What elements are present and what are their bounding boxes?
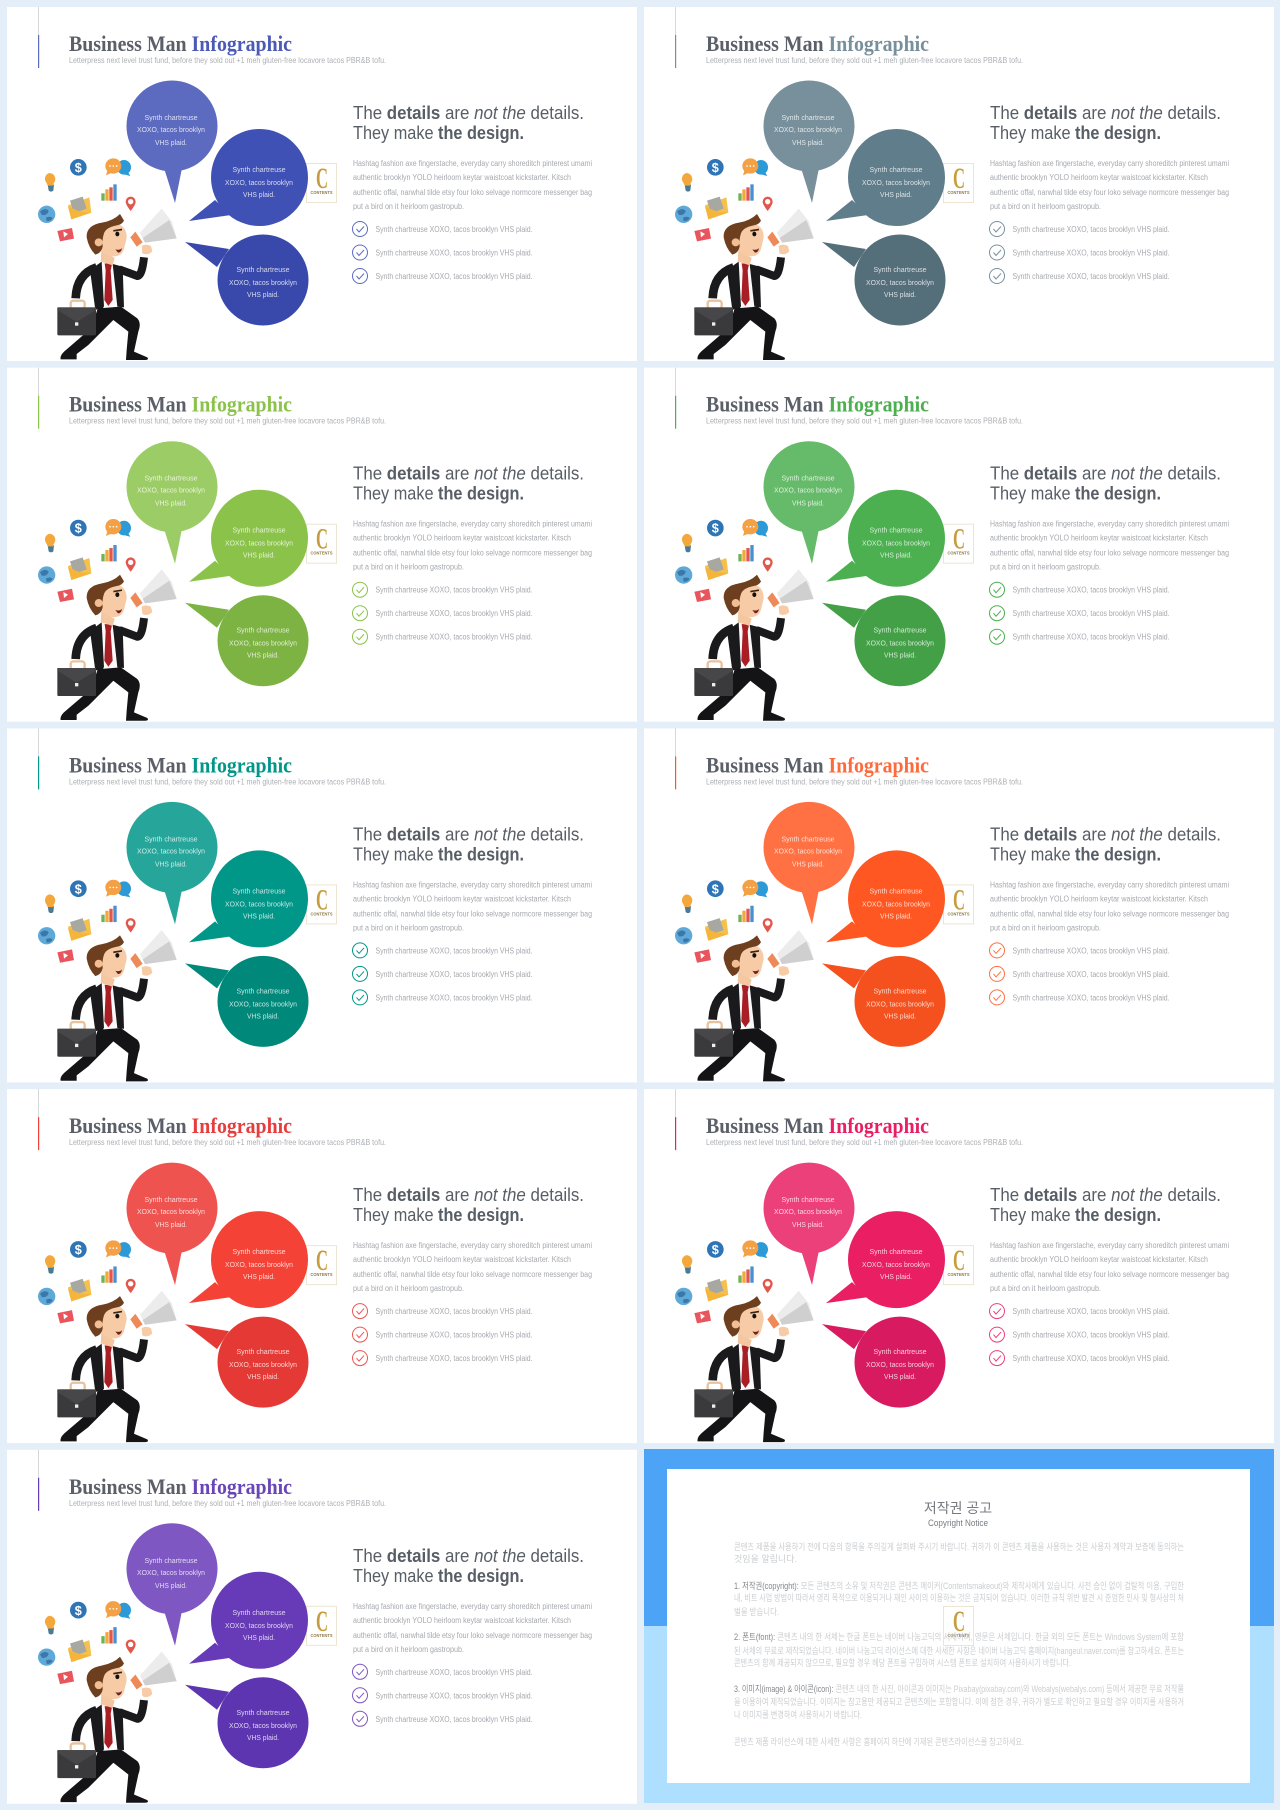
- logo: [944, 523, 974, 563]
- body text: put a bird on it heirloom gastropub.: [353, 923, 464, 932]
- subtitle: Letterpress next level trust fund, before they sold out +1 meh gluten-free locavore tacos PBR&B tofu.: [69, 56, 386, 65]
- body text: [353, 880, 592, 932]
- panel: light green: [7, 368, 637, 722]
- speech bubble 3: VHS plaid.: [247, 1011, 279, 1020]
- speech bubble 2: XOXO, tacos brooklyn: [225, 1621, 293, 1630]
- heading: copyright notice: Copyright Notice: [928, 1518, 988, 1528]
- speech bubble 1: [764, 802, 854, 924]
- heading: They make the design.: [990, 1205, 1161, 1225]
- notice text: 것임을 알립니다.: [734, 1553, 797, 1564]
- body text: put a bird on it heirloom gastropub.: [353, 202, 464, 211]
- speech bubble 1: XOXO, tacos brooklyn: [137, 1207, 205, 1216]
- speech bubble 2: [826, 490, 945, 587]
- speech bubble 2: [189, 1572, 308, 1669]
- panel: copyright notice: [644, 1449, 1274, 1803]
- body text: [990, 880, 1229, 932]
- speech bubble 1: VHS plaid.: [792, 859, 824, 868]
- speech bubble 1: Synth chartreuse: [782, 474, 834, 483]
- body text: put a bird on it heirloom gastropub.: [990, 923, 1101, 932]
- speech bubble 3: VHS plaid.: [247, 651, 279, 660]
- body text: Hashtag fashion axe fingerstache, everyday carry shoreditch pinterest umami: [990, 520, 1229, 529]
- speech bubble 1: XOXO, tacos brooklyn: [137, 846, 205, 855]
- body text: authentic brooklyn YOLO heirloom keytar waistcoat kickstarter. Kitsch: [353, 534, 571, 543]
- speech bubble 1: Synth chartreuse: [144, 474, 198, 483]
- heading: They make the design.: [990, 484, 1161, 504]
- speech bubble 3: XOXO, tacos brooklyn: [229, 999, 297, 1008]
- speech bubble 2: XOXO, tacos brooklyn: [225, 899, 293, 908]
- heading: The details are not the details.: [990, 103, 1221, 123]
- body text: put a bird on it heirloom gastropub.: [990, 202, 1101, 211]
- body text: put a bird on it heirloom gastropub.: [353, 563, 464, 572]
- speech bubble 2: XOXO, tacos brooklyn: [862, 539, 930, 548]
- title: Business Man Infographic: [69, 31, 292, 56]
- body text: authentic brooklyn YOLO heirloom keytar waistcoat kickstarter. Kitsch: [990, 1255, 1208, 1264]
- body text: put a bird on it heirloom gastropub.: [990, 563, 1101, 572]
- checklist: [990, 582, 1170, 644]
- checklist: Synth chartreuse XOXO, tacos brooklyn VHS plaid.: [376, 970, 532, 979]
- panel: orange: [644, 728, 1274, 1082]
- speech bubble 3: XOXO, tacos brooklyn: [229, 1721, 297, 1730]
- body text: [990, 520, 1229, 572]
- speech bubble 2: Synth chartreuse: [232, 526, 286, 535]
- body text: [353, 520, 592, 572]
- body text: Hashtag fashion axe fingerstache, everyday carry shoreditch pinterest umami: [990, 880, 1229, 889]
- title: Business Man Infographic: [706, 392, 929, 417]
- checklist: Synth chartreuse XOXO, tacos brooklyn VHS plaid.: [376, 272, 532, 281]
- speech bubble 2: XOXO, tacos brooklyn: [862, 178, 930, 187]
- checklist: Synth chartreuse XOXO, tacos brooklyn VHS plaid.: [376, 609, 532, 618]
- subtitle: Letterpress next level trust fund, before they sold out +1 meh gluten-free locavore tacos PBR&B tofu.: [706, 1138, 1023, 1147]
- body text: authentic brooklyn YOLO heirloom keytar waistcoat kickstarter. Kitsch: [353, 894, 571, 903]
- checklist: [352, 582, 532, 644]
- checklist: Synth chartreuse XOXO, tacos brooklyn VHS plaid.: [376, 993, 532, 1002]
- speech bubble 2: Synth chartreuse: [232, 886, 286, 895]
- checklist: Synth chartreuse XOXO, tacos brooklyn VHS plaid.: [376, 225, 532, 234]
- logo: [944, 1244, 974, 1285]
- checklist: [352, 1304, 532, 1366]
- speech bubble 3: Synth chartreuse: [236, 265, 290, 274]
- checklist: Synth chartreuse XOXO, tacos brooklyn VHS plaid.: [376, 586, 532, 595]
- body text: authentic offal, narwhal tilde etsy four loko selvage normcore messenger bag: [353, 909, 592, 918]
- icon: business man with megaphone: [38, 880, 177, 1081]
- body text: authentic brooklyn YOLO heirloom keytar waistcoat kickstarter. Kitsch: [990, 173, 1208, 182]
- heading: copyright notice: 저작권 공고: [924, 1500, 992, 1516]
- body text: authentic brooklyn YOLO heirloom keytar waistcoat kickstarter. Kitsch: [990, 894, 1208, 903]
- speech bubble 2: [189, 129, 308, 226]
- speech bubble 1: Synth chartreuse: [144, 834, 198, 843]
- speech bubble 3: XOXO, tacos brooklyn: [866, 1360, 934, 1369]
- speech bubble 2: XOXO, tacos brooklyn: [225, 539, 293, 548]
- speech bubble 3: XOXO, tacos brooklyn: [866, 999, 934, 1008]
- speech bubble 1: XOXO, tacos brooklyn: [774, 846, 842, 855]
- speech bubble 1: XOXO, tacos brooklyn: [774, 1207, 842, 1216]
- subtitle: Letterpress next level trust fund, before they sold out +1 meh gluten-free locavore tacos PBR&B tofu.: [69, 417, 386, 426]
- speech bubble 1: VHS plaid.: [155, 499, 187, 508]
- checklist: Synth chartreuse XOXO, tacos brooklyn VHS plaid.: [376, 248, 532, 258]
- body text: put a bird on it heirloom gastropub.: [990, 1284, 1101, 1293]
- logo: [306, 162, 336, 202]
- checklist: Synth chartreuse XOXO, tacos brooklyn VHS plaid.: [1012, 946, 1170, 955]
- speech bubble 1: Synth chartreuse: [782, 834, 834, 843]
- speech bubble 3: [822, 1317, 946, 1408]
- speech bubble 3: VHS plaid.: [884, 1011, 916, 1020]
- checklist: Synth chartreuse XOXO, tacos brooklyn VHS plaid.: [376, 1715, 532, 1724]
- checklist: [352, 943, 532, 1005]
- speech bubble 1: XOXO, tacos brooklyn: [137, 125, 205, 134]
- speech bubble 3: VHS plaid.: [247, 1733, 279, 1742]
- speech bubble 1: [764, 1163, 854, 1285]
- icon: business man with megaphone: [38, 158, 177, 360]
- speech bubble 2: XOXO, tacos brooklyn: [862, 1260, 930, 1269]
- panel: teal: [7, 728, 637, 1082]
- notice text: 3. 이미지(image) & 아이콘(icon): 콘텐츠 내의 한 사진, 아이콘과 이미지는 Pixabay(pixabay.com)와 Webalys(webalys.com) 등에서 제공한 무료 저작물: [734, 1683, 1184, 1694]
- body text: authentic offal, narwhal tilde etsy four loko selvage normcore messenger bag: [353, 549, 592, 558]
- checklist: Synth chartreuse XOXO, tacos brooklyn VHS plaid.: [1012, 225, 1170, 234]
- notice text: 2. 폰트(font): 콘텐츠 내의 한 서체는 한글 폰트는 네이버 나눔고딕의 서체이며, 영문은 서체입니다. 한글 외의 모든 폰트는 Windows System에 포함: [734, 1631, 1184, 1642]
- speech bubble 2: [189, 1211, 308, 1308]
- speech bubble 2: [189, 850, 308, 947]
- panel: purple: [7, 1450, 637, 1804]
- heading: [353, 464, 584, 504]
- speech bubble 3: [822, 956, 946, 1047]
- speech bubble 1: Synth chartreuse: [144, 113, 198, 122]
- body text: authentic offal, narwhal tilde etsy four loko selvage normcore messenger bag: [990, 549, 1229, 558]
- panel: indigo: [7, 7, 637, 361]
- body text: [353, 159, 592, 211]
- logo: [306, 523, 336, 563]
- checklist: Synth chartreuse XOXO, tacos brooklyn VHS plaid.: [376, 1691, 532, 1700]
- speech bubble 2: VHS plaid.: [243, 551, 275, 560]
- title: Business Man Infographic: [69, 392, 292, 417]
- checklist: Synth chartreuse XOXO, tacos brooklyn VHS plaid.: [376, 633, 532, 642]
- body text: authentic brooklyn YOLO heirloom keytar waistcoat kickstarter. Kitsch: [353, 173, 571, 182]
- speech bubble 3: [822, 234, 946, 326]
- heading: The details are not the details.: [353, 464, 584, 484]
- speech bubble 3: [185, 234, 308, 326]
- speech bubble 1: XOXO, tacos brooklyn: [774, 486, 842, 495]
- speech bubble 3: [185, 1677, 308, 1768]
- checklist: [352, 222, 532, 284]
- speech bubble 3: VHS plaid.: [247, 290, 279, 299]
- speech bubble 2: Synth chartreuse: [870, 165, 922, 174]
- checklist: Synth chartreuse XOXO, tacos brooklyn VHS plaid.: [1012, 1331, 1170, 1340]
- heading: [990, 464, 1221, 504]
- notice text: 벌을 받습니다.: [734, 1607, 779, 1617]
- heading: They make the design.: [353, 1205, 524, 1225]
- body text: put a bird on it heirloom gastropub.: [353, 1284, 464, 1293]
- notice text: 콘텐츠 제품을 사용하기 전에 다음의 항목을 주의깊게 살펴봐 주시기 바랍니다. 귀하가 이 콘텐츠 제품을 사용하는 것은 사용자 계약과 보증에 동의하는: [734, 1541, 1184, 1552]
- checklist: Synth chartreuse XOXO, tacos brooklyn VHS plaid.: [1012, 993, 1170, 1002]
- body text: Hashtag fashion axe fingerstache, everyday carry shoreditch pinterest umami: [990, 1241, 1229, 1250]
- body text: Hashtag fashion axe fingerstache, everyday carry shoreditch pinterest umami: [990, 159, 1229, 168]
- speech bubble 1: XOXO, tacos brooklyn: [137, 1568, 205, 1577]
- subtitle: Letterpress next level trust fund, before they sold out +1 meh gluten-free locavore tacos PBR&B tofu.: [69, 777, 386, 786]
- heading: [353, 824, 584, 864]
- notice text: 콘텐츠의 함께 제공되지 않으므로, 필요할 경우 해당 폰트를 구입하여 시스템 폰트로 설치하여 사용하시기 바랍니다.: [734, 1657, 1071, 1668]
- body text: [353, 1241, 592, 1293]
- speech bubble 2: [826, 850, 945, 947]
- heading: They make the design.: [353, 1566, 524, 1586]
- checklist: [990, 1304, 1170, 1366]
- icon: business man with megaphone: [38, 1240, 177, 1442]
- speech bubble 1: VHS plaid.: [155, 138, 187, 147]
- speech bubble 1: VHS plaid.: [792, 499, 824, 508]
- speech bubble 3: Synth chartreuse: [874, 986, 926, 995]
- heading: [353, 1185, 584, 1225]
- notice text: 나 이미지를 변경하여 사용하시기 바랍니다.: [734, 1709, 862, 1720]
- speech bubble 1: XOXO, tacos brooklyn: [774, 125, 842, 134]
- speech bubble 3: XOXO, tacos brooklyn: [229, 278, 297, 287]
- logo: [306, 1244, 336, 1285]
- checklist: Synth chartreuse XOXO, tacos brooklyn VHS plaid.: [376, 1307, 532, 1316]
- speech bubble 2: VHS plaid.: [880, 1272, 912, 1281]
- notice text: 1. 저작권(copyright): 모든 콘텐츠의 소유 및 저작권은 콘텐츠 메이커(Contentsmakeout)와 제작사에게 있습니다. 사전 승인 없이 겁탈적 이용, 구입한: [734, 1580, 1184, 1591]
- body text: Hashtag fashion axe fingerstache, everyday carry shoreditch pinterest umami: [353, 159, 592, 168]
- checklist: Synth chartreuse XOXO, tacos brooklyn VHS plaid.: [1012, 1307, 1170, 1316]
- subtitle: Letterpress next level trust fund, before they sold out +1 meh gluten-free locavore tacos PBR&B tofu.: [69, 1499, 386, 1508]
- body text: Hashtag fashion axe fingerstache, everyday carry shoreditch pinterest umami: [353, 520, 592, 529]
- panel: pink: [644, 1089, 1274, 1443]
- body text: authentic offal, narwhal tilde etsy four loko selvage normcore messenger bag: [990, 188, 1229, 197]
- checklist: [352, 1664, 532, 1726]
- speech bubble 1: Synth chartreuse: [782, 1195, 834, 1204]
- heading: [990, 103, 1221, 143]
- checklist: Synth chartreuse XOXO, tacos brooklyn VHS plaid.: [376, 946, 532, 955]
- heading: The details are not the details.: [353, 824, 584, 844]
- heading: The details are not the details.: [353, 103, 584, 123]
- checklist: Synth chartreuse XOXO, tacos brooklyn VHS plaid.: [376, 1354, 532, 1363]
- speech bubble 2: Synth chartreuse: [232, 1608, 286, 1617]
- checklist: Synth chartreuse XOXO, tacos brooklyn VHS plaid.: [1012, 970, 1170, 979]
- icon: business man with megaphone: [38, 1601, 177, 1803]
- logo: [944, 162, 974, 202]
- icon: business man with megaphone: [675, 158, 814, 360]
- speech bubble 1: Synth chartreuse: [144, 1556, 198, 1565]
- checklist: Synth chartreuse XOXO, tacos brooklyn VHS plaid.: [376, 1331, 532, 1340]
- speech bubble 1: VHS plaid.: [155, 1220, 187, 1229]
- speech bubble 2: XOXO, tacos brooklyn: [225, 178, 293, 187]
- checklist: [990, 943, 1170, 1005]
- body text: Hashtag fashion axe fingerstache, everyday carry shoreditch pinterest umami: [353, 1241, 592, 1250]
- speech bubble 3: [185, 956, 308, 1047]
- speech bubble 3: [185, 595, 308, 686]
- title: Business Man Infographic: [69, 752, 292, 777]
- checklist: [990, 222, 1170, 284]
- checklist: Synth chartreuse XOXO, tacos brooklyn VHS plaid.: [1012, 633, 1170, 642]
- speech bubble 3: XOXO, tacos brooklyn: [229, 1360, 297, 1369]
- logo watermark: [944, 1605, 974, 1646]
- body text: [353, 1602, 592, 1654]
- heading: The details are not the details.: [990, 1185, 1221, 1205]
- speech bubble 3: Synth chartreuse: [236, 626, 290, 635]
- speech bubble 1: [764, 80, 854, 203]
- subtitle: Letterpress next level trust fund, before they sold out +1 meh gluten-free locavore tacos PBR&B tofu.: [706, 56, 1023, 65]
- speech bubble 2: VHS plaid.: [880, 190, 912, 199]
- icon: business man with megaphone: [675, 1240, 814, 1442]
- body text: Hashtag fashion axe fingerstache, everyday carry shoreditch pinterest umami: [353, 1602, 592, 1611]
- speech bubble 1: VHS plaid.: [792, 1220, 824, 1229]
- checklist: Synth chartreuse XOXO, tacos brooklyn VHS plaid.: [376, 1668, 532, 1677]
- speech bubble 2: [189, 490, 308, 587]
- body text: authentic offal, narwhal tilde etsy four loko selvage normcore messenger bag: [353, 1270, 592, 1279]
- speech bubble 3: VHS plaid.: [247, 1372, 279, 1381]
- checklist: Synth chartreuse XOXO, tacos brooklyn VHS plaid.: [1012, 272, 1170, 281]
- speech bubble 3: Synth chartreuse: [874, 265, 926, 274]
- speech bubble 3: VHS plaid.: [884, 651, 916, 660]
- subtitle: Letterpress next level trust fund, before they sold out +1 meh gluten-free locavore tacos PBR&B tofu.: [706, 777, 1023, 786]
- subtitle: Letterpress next level trust fund, before they sold out +1 meh gluten-free locavore tacos PBR&B tofu.: [69, 1138, 386, 1147]
- speech bubble 1: [764, 441, 854, 564]
- logo: [306, 883, 336, 924]
- speech bubble 3: XOXO, tacos brooklyn: [229, 639, 297, 648]
- speech bubble 3: XOXO, tacos brooklyn: [866, 278, 934, 287]
- speech bubble 2: Synth chartreuse: [870, 1247, 922, 1256]
- heading: The details are not the details.: [353, 1546, 584, 1566]
- panel: green: [644, 368, 1274, 722]
- heading: The details are not the details.: [990, 464, 1221, 484]
- speech bubble 3: Synth chartreuse: [236, 1347, 290, 1356]
- speech bubble 1: VHS plaid.: [792, 138, 824, 147]
- heading: They make the design.: [990, 123, 1161, 143]
- logo: [306, 1605, 336, 1645]
- title: Business Man Infographic: [69, 1113, 292, 1138]
- speech bubble 2: XOXO, tacos brooklyn: [225, 1260, 293, 1269]
- body text: authentic brooklyn YOLO heirloom keytar waistcoat kickstarter. Kitsch: [353, 1616, 571, 1625]
- checklist: Synth chartreuse XOXO, tacos brooklyn VHS plaid.: [1012, 248, 1170, 258]
- speech bubble 3: [185, 1317, 308, 1408]
- heading: [353, 103, 584, 143]
- heading: They make the design.: [353, 123, 524, 143]
- speech bubble 2: [826, 1211, 945, 1308]
- body text: authentic brooklyn YOLO heirloom keytar waistcoat kickstarter. Kitsch: [353, 1255, 571, 1264]
- title: Business Man Infographic: [706, 752, 929, 777]
- speech bubble 3: Synth chartreuse: [874, 626, 926, 635]
- speech bubble 2: Synth chartreuse: [232, 165, 286, 174]
- heading: They make the design.: [353, 484, 524, 504]
- title: Business Man Infographic: [706, 31, 929, 56]
- speech bubble 3: Synth chartreuse: [236, 1708, 290, 1717]
- speech bubble 3: Synth chartreuse: [874, 1347, 926, 1356]
- speech bubble 1: XOXO, tacos brooklyn: [137, 486, 205, 495]
- speech bubble 3: [822, 595, 946, 686]
- body text: authentic offal, narwhal tilde etsy four loko selvage normcore messenger bag: [990, 909, 1229, 918]
- speech bubble 2: VHS plaid.: [880, 551, 912, 560]
- heading: [353, 1546, 584, 1586]
- speech bubble 1: [126, 1163, 218, 1285]
- panel: red: [7, 1089, 637, 1443]
- body text: put a bird on it heirloom gastropub.: [353, 1645, 464, 1654]
- title: Business Man Infographic: [69, 1474, 292, 1499]
- speech bubble 1: VHS plaid.: [155, 1581, 187, 1590]
- checklist: Synth chartreuse XOXO, tacos brooklyn VHS plaid.: [1012, 586, 1170, 595]
- speech bubble 2: VHS plaid.: [243, 911, 275, 920]
- speech bubble 2: VHS plaid.: [243, 1272, 275, 1281]
- body text: authentic offal, narwhal tilde etsy four loko selvage normcore messenger bag: [353, 1631, 592, 1640]
- heading: They make the design.: [353, 844, 524, 864]
- notice text: [734, 1541, 1184, 1747]
- body text: [990, 1241, 1229, 1293]
- speech bubble 3: Synth chartreuse: [236, 986, 290, 995]
- speech bubble 1: [126, 441, 218, 564]
- speech bubble 1: [126, 1523, 218, 1646]
- speech bubble 3: XOXO, tacos brooklyn: [866, 639, 934, 648]
- speech bubble 2: Synth chartreuse: [870, 886, 922, 895]
- speech bubble 1: Synth chartreuse: [144, 1195, 198, 1204]
- title: Business Man Infographic: [706, 1113, 929, 1138]
- speech bubble 3: VHS plaid.: [884, 290, 916, 299]
- notice text: 콘텐츠 제품 라이선스에 대한 사세한 사항은 홈페이지 하단에 기재된 콘텐츠라이선스를 참고하세요.: [734, 1736, 1024, 1747]
- speech bubble 2: VHS plaid.: [880, 911, 912, 920]
- speech bubble 2: Synth chartreuse: [870, 526, 922, 535]
- icon: business man with megaphone: [38, 519, 177, 721]
- icon: business man with megaphone: [675, 880, 814, 1081]
- logo: [944, 883, 974, 924]
- speech bubble 2: XOXO, tacos brooklyn: [862, 899, 930, 908]
- body text: authentic offal, narwhal tilde etsy four loko selvage normcore messenger bag: [353, 188, 592, 197]
- heading: [990, 824, 1221, 864]
- body text: authentic offal, narwhal tilde etsy four loko selvage normcore messenger bag: [990, 1270, 1229, 1279]
- heading: The details are not the details.: [990, 824, 1221, 844]
- speech bubble 3: VHS plaid.: [884, 1372, 916, 1381]
- heading: [990, 1185, 1221, 1225]
- heading: They make the design.: [990, 844, 1161, 864]
- speech bubble 2: Synth chartreuse: [232, 1247, 286, 1256]
- subtitle: Letterpress next level trust fund, before they sold out +1 meh gluten-free locavore tacos PBR&B tofu.: [706, 417, 1023, 426]
- heading: The details are not the details.: [353, 1185, 584, 1205]
- speech bubble 1: VHS plaid.: [155, 859, 187, 868]
- body text: authentic brooklyn YOLO heirloom keytar waistcoat kickstarter. Kitsch: [990, 534, 1208, 543]
- speech bubble 2: VHS plaid.: [243, 1633, 275, 1642]
- icon: business man with megaphone: [675, 519, 814, 721]
- speech bubble 1: [126, 80, 218, 203]
- body text: Hashtag fashion axe fingerstache, everyday carry shoreditch pinterest umami: [353, 880, 592, 889]
- speech bubble 2: VHS plaid.: [243, 190, 275, 199]
- checklist: Synth chartreuse XOXO, tacos brooklyn VHS plaid.: [1012, 609, 1170, 618]
- panel: blue grey: [644, 7, 1274, 361]
- speech bubble 2: [826, 129, 945, 226]
- checklist: Synth chartreuse XOXO, tacos brooklyn VHS plaid.: [1012, 1354, 1170, 1363]
- body text: [990, 159, 1229, 211]
- speech bubble 1: [126, 802, 218, 924]
- heading: copyright notice: [924, 1500, 992, 1528]
- speech bubble 1: Synth chartreuse: [782, 113, 834, 122]
